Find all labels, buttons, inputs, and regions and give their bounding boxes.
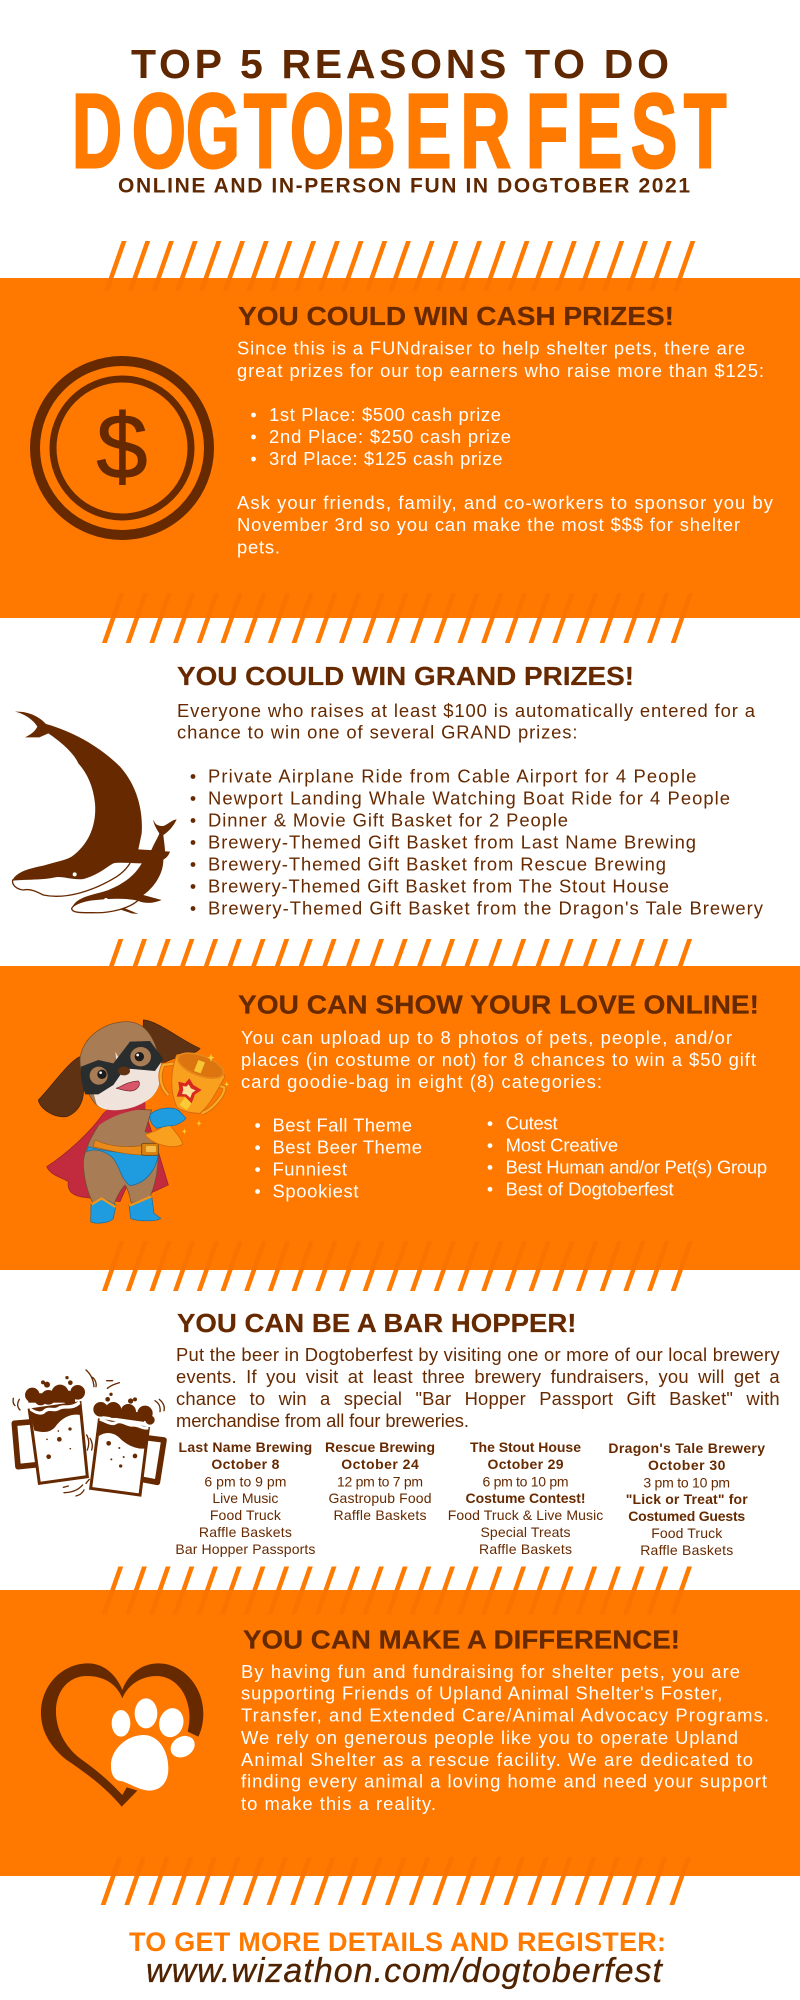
column: Dragon's Tale Brewery: 3 pm to 10 pm bbox=[643, 1474, 730, 1490]
heading: register: TO GET MORE DETAILS AND REGISTER: bbox=[129, 1927, 666, 1957]
list: categories left: Spookiest bbox=[272, 1180, 358, 1202]
text block: sponsor call: November 3rd so you can make the most $$$ for shelter bbox=[237, 514, 740, 535]
list: categories right: Best Human and/or Pet(s) Group bbox=[506, 1156, 767, 1177]
title: Dogtoberfest: DOGTOBERFEST bbox=[72, 71, 726, 189]
footer: call to action bbox=[129, 1927, 666, 1990]
title line: top 5 reasons: TOP 5 REASONS TO DO bbox=[131, 41, 669, 87]
text block: difference body: By having fun and fundraising for shelter pets, you are bbox=[241, 1661, 740, 1682]
column: The Stout House: Special Treats bbox=[480, 1524, 570, 1540]
section: bar hopper bbox=[13, 1308, 780, 1558]
list: grand prizes: Private Airplane Ride from Cable Airport for 4 People bbox=[208, 766, 696, 786]
column: Last Name Brewing: Raffle Baskets bbox=[199, 1524, 292, 1540]
column: Rescue Brewing: 12 pm to 7 pm bbox=[337, 1474, 423, 1490]
column: Rescue Brewing bbox=[325, 1439, 435, 1523]
list: categories left: Best Beer Theme bbox=[272, 1137, 422, 1158]
column: Last Name Brewing: Last Name Brewing bbox=[179, 1439, 312, 1455]
text block: grand intro: chance to win one of several GRAND prizes: bbox=[177, 722, 578, 743]
text block: difference body: We rely on generous people like you to operate Upland bbox=[241, 1727, 738, 1748]
icon: clinking beer mugs bbox=[13, 1370, 164, 1496]
column: The Stout House bbox=[448, 1439, 603, 1557]
list: categories left: Funniest bbox=[272, 1159, 347, 1180]
column: The Stout House: Costume Contest! bbox=[466, 1490, 586, 1506]
list: cash prizes bbox=[251, 404, 511, 469]
icon: superhero dog with trophy bbox=[38, 1020, 229, 1223]
panel: show your love online bbox=[0, 966, 800, 1270]
text block: photo upload: places (in costume or not) for 8 chances to win a $50 gift bbox=[241, 1049, 756, 1070]
text block: brewery intro: chance to win a special "Bar Hopper Passport Gift Basket" with bbox=[176, 1388, 780, 1409]
column: Last Name Brewing: October 8 bbox=[211, 1456, 280, 1472]
text block: brewery intro: merchandise from all four breweries. bbox=[176, 1410, 469, 1431]
text block: brewery intro: Put the beer in Dogtoberfest by visiting one or more of our local brewery bbox=[176, 1344, 780, 1365]
panel: cash prizes bbox=[0, 278, 800, 618]
column: Dragon's Tale Brewery: October 30 bbox=[648, 1457, 726, 1473]
list: categories left: Best Fall Theme bbox=[272, 1114, 412, 1135]
text block: grand intro: Everyone who raises at least $100 is automatically entered for a bbox=[177, 700, 756, 721]
column: Dragon's Tale Brewery: Costumed Guests bbox=[628, 1508, 745, 1524]
text block: difference body: Animal Shelter as a rescue facility. We are dedicated to bbox=[241, 1749, 753, 1770]
text block: difference body: supporting Friends of Upland Animal Shelter's Foster, bbox=[241, 1683, 722, 1704]
column: Last Name Brewing: Bar Hopper Passports bbox=[175, 1541, 315, 1557]
link text: website: www.wizathon.com/dogtoberfest bbox=[146, 1952, 664, 1990]
text block: cash intro bbox=[237, 338, 764, 381]
column: Rescue Brewing: October 24 bbox=[341, 1456, 419, 1472]
list: categories left bbox=[255, 1114, 422, 1202]
text block: difference body bbox=[241, 1661, 769, 1814]
list: grand prizes: Brewery-Themed Gift Basket from Last Name Brewing bbox=[208, 832, 696, 852]
text block: difference body: to make this a reality. bbox=[241, 1793, 436, 1814]
text block: photo upload: card goodie-bag in eight (8) categories: bbox=[241, 1071, 602, 1092]
heading: show your love: YOU CAN SHOW YOUR LOVE ONLINE! bbox=[238, 990, 759, 1020]
list: categories right: Most Creative bbox=[506, 1135, 618, 1156]
list: cash prizes: 3rd Place: $125 cash prize bbox=[269, 448, 502, 469]
heading: grand prizes: YOU COULD WIN GRAND PRIZES! bbox=[177, 661, 634, 691]
column: The Stout House: The Stout House bbox=[470, 1439, 581, 1455]
text block: sponsor call: Ask your friends, family, and co-workers to sponsor you by bbox=[237, 492, 774, 513]
text block: photo upload bbox=[241, 1027, 756, 1092]
column: The Stout House: 6 pm to 10 pm bbox=[482, 1474, 568, 1490]
heading: cash prizes: YOU COULD WIN CASH PRIZES! bbox=[238, 301, 674, 331]
list: grand prizes: Newport Landing Whale Watching Boat Ride for 4 People bbox=[208, 788, 730, 808]
icon: whales bbox=[13, 712, 177, 914]
column: Dragon's Tale Brewery: Food Truck bbox=[651, 1525, 723, 1541]
text block: brewery intro: events. If you visit at least three brewery fundraisers, you will get a bbox=[176, 1366, 780, 1387]
text block: cash intro: great prizes for our top earners who raise more than $125: bbox=[237, 360, 764, 381]
text block: brewery intro bbox=[176, 1344, 780, 1431]
column: Last Name Brewing: 6 pm to 9 pm bbox=[204, 1474, 286, 1490]
text block: sponsor call bbox=[237, 492, 774, 558]
column: Rescue Brewing: Gastropub Food bbox=[328, 1490, 432, 1506]
column: The Stout House: October 29 bbox=[488, 1456, 564, 1472]
column: Last Name Brewing: Food Truck bbox=[210, 1507, 282, 1523]
column: The Stout House: Raffle Baskets bbox=[479, 1541, 572, 1557]
text block: grand intro bbox=[177, 700, 756, 743]
list: categories right bbox=[488, 1113, 767, 1199]
panel: make a difference bbox=[0, 1590, 800, 1876]
column: Last Name Brewing: Live Music bbox=[212, 1490, 278, 1506]
icon: heart with paw bbox=[41, 1663, 203, 1807]
column: Last Name Brewing bbox=[175, 1439, 315, 1557]
heading: make a difference: YOU CAN MAKE A DIFFERENCE! bbox=[243, 1624, 680, 1654]
heading: bar hopper: YOU CAN BE A BAR HOPPER! bbox=[177, 1308, 576, 1338]
text block: photo upload: You can upload up to 8 photos of pets, people, and/or bbox=[241, 1027, 732, 1048]
column: Dragon's Tale Brewery bbox=[608, 1440, 765, 1558]
column: Dragon's Tale Brewery: "Lick or Treat" for bbox=[626, 1491, 748, 1507]
subtitle: ONLINE AND IN-PERSON FUN IN DOGTOBER 2021 bbox=[118, 174, 690, 198]
list: cash prizes: 2nd Place: $250 cash prize bbox=[269, 426, 511, 447]
list: grand prizes bbox=[191, 766, 764, 918]
column: Dragon's Tale Brewery: Dragon's Tale Brewery bbox=[608, 1440, 765, 1456]
text block: difference body: Transfer, and Extended Care/Animal Advocacy Programs. bbox=[241, 1705, 769, 1726]
list: grand prizes: Brewery-Themed Gift Basket from Rescue Brewing bbox=[208, 854, 666, 874]
column: Rescue Brewing: Raffle Baskets bbox=[334, 1507, 426, 1523]
section: grand prizes bbox=[13, 661, 764, 918]
column: Rescue Brewing: Rescue Brewing bbox=[325, 1439, 435, 1455]
list: grand prizes: Brewery-Themed Gift Basket from The Stout House bbox=[208, 876, 669, 896]
text block: cash intro: Since this is a FUNdraiser to help shelter pets, there are bbox=[237, 338, 745, 359]
list: categories right: Best of Dogtoberfest bbox=[506, 1178, 674, 1199]
text block: difference body: finding every animal a loving home and need your support bbox=[241, 1771, 767, 1792]
column: Dragon's Tale Brewery: Raffle Baskets bbox=[640, 1542, 733, 1558]
list: cash prizes: 1st Place: $500 cash prize bbox=[269, 404, 501, 425]
list: grand prizes: Brewery-Themed Gift Basket from the Dragon's Tale Brewery bbox=[208, 898, 764, 918]
column: The Stout House: Food Truck & Live Music bbox=[448, 1507, 603, 1523]
icon: dollar coin: $ bbox=[96, 396, 148, 498]
list: categories right: Cutest bbox=[506, 1113, 558, 1134]
icon: dollar coin bbox=[35, 361, 209, 535]
header: title block bbox=[72, 41, 726, 198]
text block: sponsor call: pets. bbox=[237, 536, 280, 558]
list: grand prizes: Dinner & Movie Gift Basket for 2 People bbox=[208, 810, 568, 830]
